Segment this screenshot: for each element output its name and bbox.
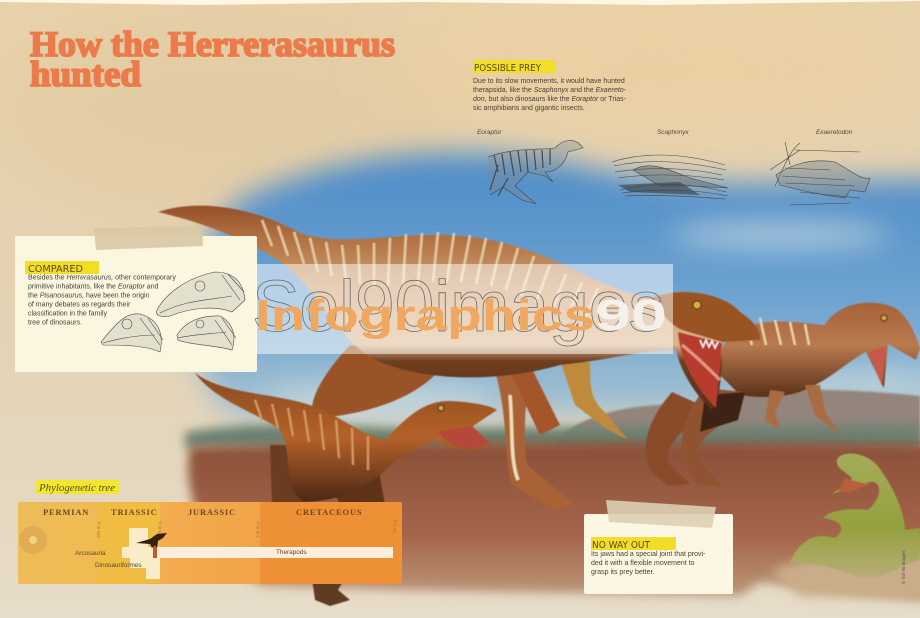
panel: compared <box>15 226 257 372</box>
era labels: CRETACEOUS <box>296 507 362 517</box>
prey labels: Eoraptor <box>477 129 502 136</box>
prey description: sic amphibians and gigantic insects. <box>473 105 585 112</box>
open mouth <box>678 332 722 408</box>
near leg <box>490 355 575 510</box>
prey labels <box>477 129 853 136</box>
clade labels <box>75 549 307 569</box>
possible prey block <box>473 60 853 136</box>
watermark: Infographics <box>255 291 595 340</box>
marker <box>153 545 157 558</box>
title <box>30 24 395 94</box>
title: hunted <box>30 54 141 94</box>
watermark: Sol90images <box>252 267 664 347</box>
compared text: primitive inhabitants, like the Eoraptor and <box>28 284 158 290</box>
timeline bar <box>18 502 402 584</box>
clade labels: Arcosauria <box>75 550 106 557</box>
far leg <box>560 360 628 440</box>
era labels: JURASSIC <box>188 507 236 517</box>
no way out text: Its jaws had a special joint that provi- <box>591 551 706 558</box>
arm <box>505 360 560 435</box>
dinosaur: juvenile in foreground <box>195 373 497 606</box>
date labels: 208 m.y. <box>157 521 162 538</box>
therapods bar <box>157 547 393 558</box>
era labels: TRIASSIC <box>111 507 158 517</box>
prey description: don, but also dinosaurs like the Eoraptor or Trias- <box>473 96 626 103</box>
dinosaur: second herrerasaurus <box>646 303 920 486</box>
prey description: therapsida, like the Scaphonyx and the Exaereto- <box>473 87 626 94</box>
tape <box>606 500 716 528</box>
era block: cretaceous <box>260 503 401 583</box>
credit: © Sol 90 Images <box>900 550 906 584</box>
clade labels: Dinosauriformes <box>95 562 142 569</box>
sketch: Exaeretodon <box>770 142 870 205</box>
clade labels: Therapods <box>276 549 307 556</box>
logo seal <box>19 526 47 554</box>
lizard prey <box>770 454 920 600</box>
heading: no way out <box>591 537 676 551</box>
clouds near horizon <box>260 221 920 416</box>
prey labels: Exaeretodon <box>816 129 853 136</box>
compared text: classification in the family <box>28 310 107 318</box>
icon: dinosaur silhouette <box>136 533 167 548</box>
dorsal stripes <box>262 220 598 322</box>
sketch: three skulls <box>101 272 245 352</box>
panel: no way out <box>584 500 733 594</box>
sketch: Eoraptor <box>488 140 583 204</box>
compared text: Besides the Herrerasaurus, other contemporary <box>28 274 176 282</box>
heading: compared: COMPARED <box>28 264 83 275</box>
compared text: tree of dinosaurs. <box>28 320 82 326</box>
title: How the Herrerasaurus <box>30 24 395 64</box>
rear thigh and leg <box>312 345 445 418</box>
date labels <box>96 519 397 538</box>
prey labels: Scaphonyx <box>657 129 689 136</box>
tape <box>94 226 203 250</box>
head <box>652 292 760 342</box>
painted sky <box>196 153 920 420</box>
dinosaur: main herrerasaurus <box>158 206 760 510</box>
prey description: Due to its slow movements, it would have hunted <box>473 78 625 85</box>
phylogenetic tree panel <box>18 480 402 584</box>
compared text: of many debates as regards their <box>28 302 131 308</box>
date labels: 146 m.y. <box>255 521 260 538</box>
era labels: PERMIAN <box>43 507 89 517</box>
tree branches <box>122 528 160 579</box>
no way out text: grasp its prey better. <box>591 569 654 576</box>
heading: compared <box>25 261 99 275</box>
date labels: 250 m.y. <box>96 521 101 538</box>
era labels <box>43 507 362 517</box>
heading: phylogenetic tree <box>36 480 119 494</box>
sketch: Scaphonyx <box>612 155 728 199</box>
watermark: 90 <box>595 291 667 340</box>
no way out text: ded it with a flexible movement to <box>591 560 695 567</box>
date labels: 65 m.y. <box>392 519 397 533</box>
heading: possible prey: POSSIBLE PREY <box>474 63 541 74</box>
era block: triassic <box>100 503 160 583</box>
heading: no way out: NO WAY OUT <box>592 540 650 551</box>
distant hills and vegetation <box>185 390 920 450</box>
compared text: the Pisanosaurus, have been the origin <box>28 292 149 300</box>
heading: phylogenetic tree: Phylogenetic tree <box>38 483 116 494</box>
ground <box>188 442 920 600</box>
body <box>158 206 760 410</box>
